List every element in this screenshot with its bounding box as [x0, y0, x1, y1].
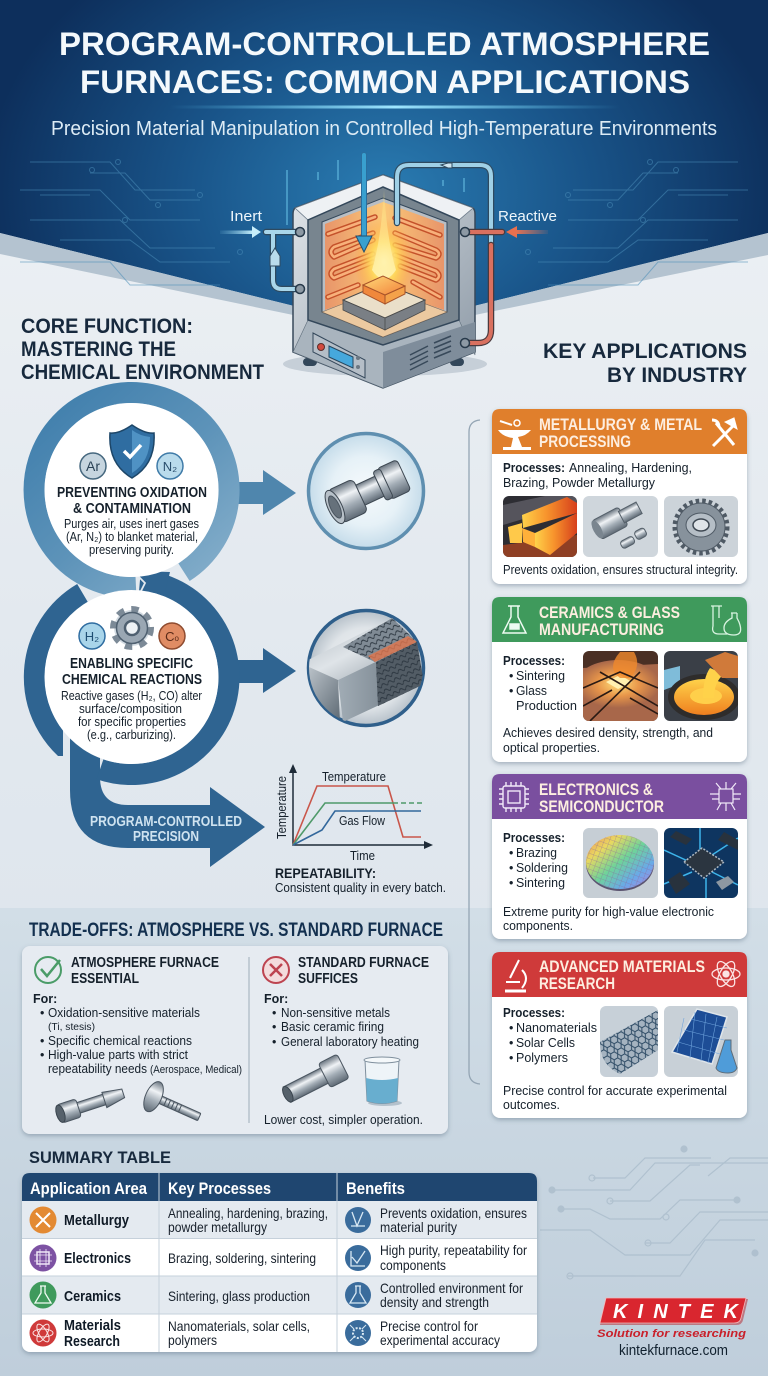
- gas pipes: [266, 155, 502, 343]
- column heading: [71, 955, 219, 987]
- footnote: Lower cost, simpler operation.: [264, 1112, 423, 1127]
- arrow label: program-controlled precision: PRECISION: [133, 829, 199, 845]
- icon: machined metal part: [308, 434, 424, 548]
- process list: Annealing, Hardening,: [569, 461, 692, 475]
- card title: [539, 957, 705, 993]
- logo: KINTEK: Solution for researching: [597, 1328, 746, 1340]
- image: integrated circuit: [664, 828, 738, 898]
- list: High-value parts with strict: [48, 1048, 189, 1062]
- subtitle: Precision Material Manipulation in Controlled High-Temperature Environments: [51, 118, 717, 140]
- row: electronics: components: [380, 1257, 446, 1273]
- hero header background: [0, 0, 768, 316]
- icon: chip: [30, 1244, 56, 1272]
- row: metallurgy: powder metallurgy: [168, 1219, 267, 1235]
- icon: flask: [30, 1282, 56, 1308]
- process list: Brazing, Powder Metallurgy: [503, 476, 656, 490]
- row: ceramics: Controlled environment for: [380, 1280, 523, 1296]
- column heading: SUFFICES: [298, 971, 358, 987]
- flow ring: oxidation (upper ring): [34, 393, 229, 588]
- row: electronics: Electronics: [64, 1251, 131, 1267]
- process list: •: [509, 1051, 513, 1065]
- image: silicon wafer: [583, 828, 658, 898]
- line chart: temperature and gas flow over time: Time: [350, 849, 375, 863]
- icon: argon gas: Ar: [86, 458, 100, 474]
- card title: [539, 415, 702, 451]
- row: materials research: Research: [64, 1334, 120, 1350]
- list: •: [40, 1034, 44, 1048]
- description: Purges air, uses inert gases: [64, 517, 199, 531]
- benefit text: Extreme purity for high-value electronic: [503, 905, 714, 919]
- row: materials research: experimental accuracy: [380, 1332, 500, 1348]
- icon: aerospace fastener: [140, 1079, 206, 1132]
- description: preserving purity.: [89, 543, 174, 557]
- row: metallurgy: material purity: [380, 1219, 457, 1235]
- summary table heading: SUMMARY TABLE: [29, 1148, 171, 1167]
- benefit text: [503, 905, 714, 933]
- image: carbon nanotube: [600, 1006, 658, 1077]
- heading: [57, 485, 207, 517]
- benefit text: outcomes.: [503, 1098, 560, 1112]
- row: metallurgy: [30, 1205, 527, 1235]
- card title: METALLURGY & METAL: [539, 415, 702, 434]
- process list: Processes:: [503, 1006, 565, 1020]
- heading: CHEMICAL REACTIONS: [62, 672, 202, 688]
- image: sintered ceramic tiles: [583, 651, 658, 721]
- title: FURNACES: COMMON APPLICATIONS: [80, 64, 690, 100]
- list: Basic ceramic firing: [281, 1020, 384, 1034]
- row: ceramics: Ceramics: [64, 1289, 121, 1305]
- row: materials research: Nanomaterials, solar cells,: [168, 1318, 310, 1334]
- table header row: Key Processes: [168, 1179, 271, 1198]
- table header row: Application Area: [30, 1179, 147, 1198]
- benefit text: optical properties.: [503, 741, 600, 755]
- row: materials research: polymers: [168, 1332, 217, 1348]
- icon: gear: [114, 610, 150, 646]
- list: General laboratory heating: [281, 1035, 419, 1049]
- process list: [503, 831, 568, 890]
- repeatability note: Consistent quality in every batch.: [275, 881, 446, 895]
- icon: glassware: [711, 606, 741, 635]
- repeatability note: REPEATABILITY:: [275, 866, 376, 881]
- card title: [539, 603, 680, 639]
- card title: [539, 780, 664, 816]
- icon: tools: [30, 1206, 56, 1234]
- benefit text: Achieves desired density, strength, and: [503, 726, 713, 740]
- list: •: [272, 1035, 276, 1049]
- row: ceramics: [30, 1280, 523, 1310]
- process list: •: [509, 1021, 513, 1035]
- list: •: [40, 1048, 44, 1062]
- card title: MANUFACTURING: [539, 620, 664, 639]
- control panel: [313, 333, 365, 378]
- list: For:: [33, 992, 57, 1006]
- icon: surface treated bar: [298, 610, 424, 726]
- process list: Processes:: [503, 654, 565, 668]
- process list: •: [509, 876, 513, 890]
- card title: RESEARCH: [539, 974, 615, 993]
- line chart: temperature and gas flow over time: Temperature: [322, 770, 386, 784]
- column heading: STANDARD FURNACE: [298, 955, 429, 971]
- column heading: ATMOSPHERE FURNACE: [71, 955, 219, 971]
- list: •: [40, 1006, 44, 1020]
- icon: nitrogen gas: [157, 453, 183, 479]
- panel: trade-offs: [22, 946, 448, 1134]
- list: Non-sensitive metals: [281, 1006, 390, 1020]
- list: [264, 992, 419, 1049]
- column: atmosphere furnace essential: [33, 955, 242, 1132]
- card title: SEMICONDUCTOR: [539, 797, 664, 816]
- icon: carbon monoxide: [159, 623, 185, 649]
- column heading: ESSENTIAL: [71, 971, 139, 987]
- description: (Ar, N₂) to blanket material,: [66, 530, 198, 544]
- row: ceramics: Sintering, glass production: [168, 1288, 310, 1304]
- logo: KINTEK: KINTEK: [613, 1301, 740, 1323]
- image: powder metal gear: [664, 496, 738, 557]
- description: (e.g., carburizing).: [87, 728, 176, 742]
- image: molten glass pour: [664, 651, 740, 721]
- card: electronics: [492, 774, 747, 939]
- process list: [503, 654, 577, 713]
- row: metallurgy: Metallurgy: [64, 1213, 129, 1229]
- icon: shield: [110, 425, 154, 478]
- process list: Processes:: [503, 461, 565, 475]
- row: materials research: Materials: [64, 1318, 121, 1334]
- heading: PREVENTING OXIDATION: [57, 485, 207, 501]
- line chart: temperature and gas flow over time: Temperature: [275, 776, 289, 839]
- icon: carbon monoxide: Co: [165, 629, 179, 644]
- process list: Nanomaterials: [516, 1021, 597, 1035]
- icon: circuit node: [710, 782, 741, 811]
- process list: Glass: [516, 684, 547, 698]
- process list: •: [509, 846, 513, 860]
- card: metallurgy: [492, 409, 747, 584]
- title: PROGRAM-CONTROLLED ATMOSPHERE: [59, 26, 710, 62]
- heading: key applications: BY INDUSTRY: [607, 364, 747, 387]
- card title: ADVANCED MATERIALS: [539, 957, 705, 976]
- process list: •: [509, 669, 513, 683]
- list: For:: [264, 992, 288, 1006]
- icon: benefit purity: [345, 1207, 371, 1233]
- row: materials research: [30, 1318, 500, 1350]
- icon: atom: [712, 959, 740, 989]
- description: [64, 517, 199, 557]
- card title: ELECTRONICS &: [539, 780, 653, 799]
- process list: •: [509, 1036, 513, 1050]
- image: machined cylinder parts: [583, 496, 658, 557]
- application list bracket: [469, 420, 480, 1084]
- column heading: [298, 955, 429, 987]
- icon: benefit flask: [345, 1282, 371, 1308]
- icon: flask: [503, 606, 526, 633]
- table header row: Benefits: [346, 1179, 405, 1198]
- icon: argon gas: [80, 453, 106, 479]
- trade-offs heading: TRADE-OFFS: ATMOSPHERE VS. STANDARD FURNACE: [29, 920, 443, 941]
- description: [61, 689, 202, 742]
- arrow: reactions to treated part: [236, 648, 296, 693]
- heading: core function: CHEMICAL ENVIRONMENT: [21, 361, 264, 384]
- line chart: temperature and gas flow over time: [275, 764, 433, 863]
- benefit text: components.: [503, 919, 573, 933]
- icon: atom: [30, 1320, 56, 1346]
- list: (Ti, stesis): [48, 1022, 95, 1033]
- heating coils: [328, 217, 440, 297]
- arrow label: program-controlled precision: PROGRAM-CONTROLLED: [90, 814, 242, 830]
- list: Specific chemical reactions: [48, 1034, 192, 1048]
- arrow: oxidation to clean part: [236, 470, 296, 515]
- benefit text: Prevents oxidation, ensures structural integrity.: [503, 563, 738, 577]
- card: ceramics and glass: [492, 597, 747, 762]
- list: repeatability needs: [48, 1062, 147, 1076]
- process list: Solar Cells: [516, 1036, 575, 1050]
- summary table: [22, 1173, 537, 1352]
- image: glowing metal bars: [503, 496, 577, 557]
- icon: hydrogen gas: [79, 623, 105, 649]
- table header row: [30, 1179, 405, 1198]
- heading: core function: CORE FUNCTION:: [21, 315, 193, 338]
- process list: •: [509, 861, 513, 875]
- reactive label and arrow: [498, 209, 557, 238]
- process list: [503, 461, 692, 490]
- icon: nitrogen gas: N₂: [163, 459, 177, 474]
- icon: simple metal part: [278, 1054, 349, 1108]
- flow ring: chemical reactions (lower ring): [34, 593, 265, 867]
- process list: Processes:: [503, 831, 565, 845]
- list: (Aerospace, Medical): [150, 1064, 242, 1076]
- icon: cross mark: [263, 957, 289, 983]
- benefit text: [503, 1084, 727, 1112]
- icon: sensitive metal part: [54, 1084, 126, 1124]
- heading: key applications: KEY APPLICATIONS: [543, 340, 747, 363]
- image: solar panel and flask: [664, 1006, 738, 1077]
- arrow label: program-controlled precision: [90, 814, 242, 845]
- process list: Sintering: [516, 876, 565, 890]
- panel: preventing oxidation: [44, 403, 218, 577]
- icon: benefit control: [345, 1320, 371, 1346]
- inert label and arrow: [220, 209, 262, 238]
- panel: enabling chemical reactions: [44, 590, 218, 764]
- heading: [62, 656, 202, 688]
- furnace illustration: [266, 155, 502, 388]
- row: electronics: Brazing, soldering, sintering: [168, 1250, 316, 1266]
- benefit text: [503, 726, 713, 755]
- website: kintekfurnace.com: [619, 1342, 728, 1359]
- icon: beaker: [364, 1057, 402, 1106]
- process list: [503, 1006, 597, 1065]
- icon: anvil: [498, 420, 531, 450]
- repeatability note: [275, 866, 446, 895]
- title: [59, 26, 710, 100]
- logo: KINTEK: [597, 1298, 748, 1340]
- list: [33, 992, 242, 1076]
- description: surface/composition: [79, 702, 182, 716]
- process list: •: [509, 684, 513, 698]
- row: ceramics: density and strength: [380, 1294, 489, 1310]
- benefit text: Precise control for accurate experimental: [503, 1084, 727, 1098]
- vents: [410, 336, 451, 370]
- process list: Sintering: [516, 669, 565, 683]
- row: electronics: High purity, repeatability for: [380, 1242, 527, 1258]
- icon: check mark: [35, 957, 61, 983]
- icon: hydrogen gas: H₂: [85, 629, 99, 644]
- flow ring: reaction ring head: [100, 570, 229, 775]
- list: •: [272, 1020, 276, 1034]
- icon: microchip: [499, 782, 529, 812]
- heading: & CONTAMINATION: [73, 501, 191, 517]
- icon: hammer and wrench: [712, 418, 737, 446]
- row: materials research: Precise control for: [380, 1318, 478, 1334]
- icon: benefit repeatability: [345, 1245, 371, 1271]
- column: standard furnace suffices: [263, 955, 429, 1127]
- list: •: [272, 1006, 276, 1020]
- process list: Brazing: [516, 846, 557, 860]
- heading: core function: [21, 315, 264, 384]
- card title: PROCESSING: [539, 432, 631, 451]
- icon: microscope: [505, 960, 526, 991]
- reactive label and arrow: Reactive: [498, 209, 557, 225]
- row: metallurgy: Prevents oxidation, ensures: [380, 1205, 527, 1221]
- list: Oxidation-sensitive materials: [48, 1006, 200, 1020]
- card title: CERAMICS & GLASS: [539, 603, 680, 622]
- row: electronics: [30, 1242, 527, 1273]
- process list: Soldering: [516, 861, 568, 875]
- card: advanced materials: [492, 952, 747, 1118]
- inert label and arrow: Inert: [230, 209, 262, 225]
- description: for specific properties: [78, 715, 186, 729]
- process list: Production: [516, 699, 577, 713]
- row: metallurgy: Annealing, hardening, brazing,: [168, 1205, 328, 1221]
- description: Reactive gases (H₂, CO) alter: [61, 689, 202, 703]
- line chart: temperature and gas flow over time: Gas Flow: [339, 814, 386, 828]
- heading: core function: MASTERING THE: [21, 338, 176, 361]
- process list: Polymers: [516, 1051, 568, 1065]
- heading: key applications: [543, 340, 747, 387]
- heading: ENABLING SPECIFIC: [70, 656, 193, 672]
